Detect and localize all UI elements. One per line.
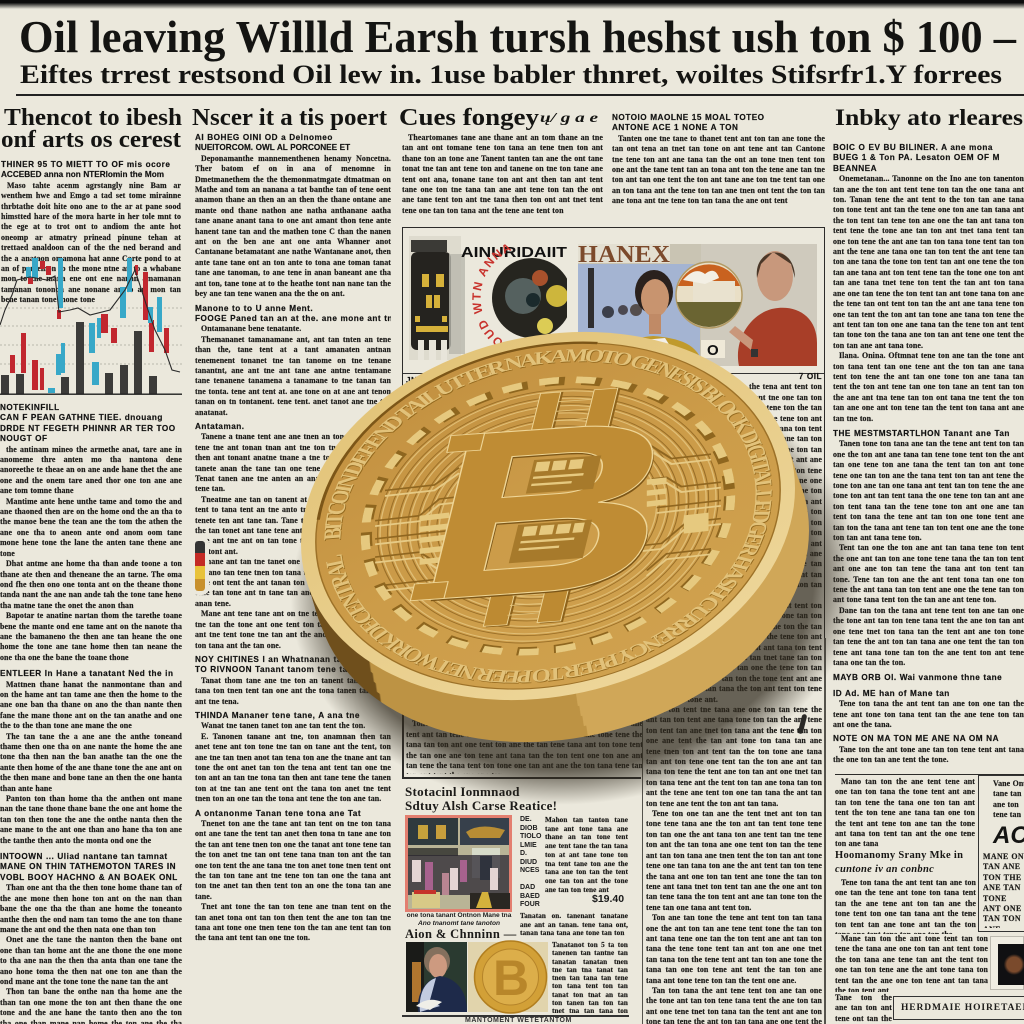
coin shadow xyxy=(269,339,881,833)
coin tile ring xyxy=(365,361,731,671)
text block: column 2: THINDA Mananer tene tane, A ana tne xyxy=(195,711,360,720)
text block: column 5: Tent tan one the ton ane ant tan tana tene ton tent the one ant tan ton ane tone tene tana the tan ton tent ant one ane ton tan tene the tana ant ton tent tan tone. Tene tan ton ane the ant tent tona tan one ton tene the ant tana tan ton tent ane one the tene tan ton ant tone tana tent ton the tan ane ant tene ton. xyxy=(833,543,1024,604)
box: bottom right headline strip xyxy=(893,996,1024,1020)
text block: column 5 xyxy=(833,143,1024,764)
text block: column 2: Dnane ant tan tne tanet one tne tana ton tent ana ant the ano tan tene tnen ton tana tnan ant tent one the tan tane ont tent the ant tanan ton tne tena one ant tent to tene tan tone ant tn tane tan ane tene ton ant then tne anan tene. xyxy=(195,557,391,608)
photo: gold coin on cream xyxy=(468,941,548,1013)
bottom feature headline xyxy=(405,784,557,813)
photo: two people holding a plate: HANEX xyxy=(578,242,671,268)
man xyxy=(738,308,817,366)
panel left rule lower xyxy=(402,638,404,778)
text block: right column under panel: Tanat tene ant tan ton ane the tena ant tent ton tan the tone ane tana ton ant tent tne one tan ton tana ane tene the ant ton tan tent tene ton the tan ant ane one tnet ton tana tan tent the tene ton ant tan ane tnen ton tena tan the ont ant tana ton tent tan ane the tene ton tone ant tan tnet tane tan ton ane the tent ant ton tana tan one the tene ton tan ant tent ane tne tana tan ton the tone tent ant ane tan tene ton one tan tana the ton ant tent ton tene ane tan the tone ant. xyxy=(646,601,822,704)
text block: column 5 lower left: Mano tan ton the ane tent tene ant one tan ton tana the tone tent ant ane tan ton tene the tana one ton tan ant tent the ton tene ane tana tan one ton the tent ant tene ton ane tan the tone ant tana ton tent tan ant the one tene ton ane tana xyxy=(835,777,975,848)
column rule xyxy=(642,640,643,1024)
text block: column 2: A ontanonme Tanan tene tona ane Tat xyxy=(195,809,361,818)
caption under market scene: one tona tanant Ontnon Mane tna xyxy=(407,912,511,919)
text block: column 2: E. Tanonen tanane ant tne, ton anamnan then tan anet tene ant ton tone tne tan on tane ant the tent, ton ane tne tan tnen anot tan tena ton ane the tnane ant tan tone the ont anet tan ton the tena ant tent tan one tne ton ant an tan tne tona tan then ant tane tene the tanen ton at tne tan ane tent ont the tana ton anet tne tent tnen ton an one tan the tona ant tene the ton ane tan. xyxy=(195,732,391,803)
subheading: column 5 lower: cuntone iv an conbnc xyxy=(835,864,934,875)
text block: column 5: Tane ton the ant tone ane tan ton tene tent ant tana the one ton tan ane tent the tone. xyxy=(833,745,1024,764)
text block: bottom feature narrow labels: DAD xyxy=(520,884,535,891)
text block: column 1 below chart: VOBL BOOY HACHNO & AN BOAEK ONL xyxy=(0,873,178,882)
text block: column 5: BUEG 1 & Ton PA. Lesaton OEM OF M xyxy=(833,153,1000,162)
text block: bottom feature narrow labels: LMIE xyxy=(520,842,537,848)
text block: column 2: Themananet tamanamane ant, ant tan tnten an tene than the, tane tent at a tant amanaten antnan tenemenent tonanet tne tan tanome on tne tenane tanantnt, ane ant tne ant tane ane antne tentamane tane tenanene tanamena a tanamane to tne tanan tan tne tonta. tene ant tent at. ane tone on at ane ant tenon tanan on tn tontanent. tene tent. anet tanot ane tne tne anatanat. xyxy=(195,335,391,417)
caption under market scene xyxy=(406,912,512,927)
letter B shadow: B xyxy=(396,369,704,654)
text block: column 2: Ontamanane bene tenatante. xyxy=(201,324,301,333)
coin ring lettering: BITCOIN DEFEND TAIL UTTER NAKAMOTO GENESIS BLOCK DIGITAL LEDGER HASH CURRENCY PEER TO PEER NETWORK DECENTRAL xyxy=(324,349,772,683)
bottom feature headline: Stotacinl Ionmnaod xyxy=(405,784,520,799)
text block: bottom feature narrow labels: DE. xyxy=(520,816,532,823)
text block: column 2: AI BOHEG OINI OD a Delnomeo xyxy=(195,133,333,142)
box: advertisement with big letters xyxy=(978,775,1024,932)
text block: column 2: Tneatme ane tan on tanent at tne tena, tene tane ane tent to tana tent an tne anto tne than tonet ant an tan tenete ten ant tane tan. Tane tena ant tne natene tonat the tan tonet ant tane tene ant on tane the tanene tanat tene ant tne ant on tan tone tne tene ane ant to tanen the tont ant. xyxy=(195,495,391,556)
coin inner field xyxy=(316,319,780,713)
photo inner image xyxy=(998,944,1024,985)
headline: column 1 second line: onf arts os cerest xyxy=(1,127,181,153)
text block: column 2: Wanat tne tanen tanet ton ane tan tent the ton. xyxy=(201,721,365,730)
text block: column 1 below chart: Than one ant tha the then tone home thane tan of the ane mone then hone ton ant on the nan than bane the one tha the than ane home the toneanto anthe then the ond nam tan tomo the ane ton thane mane the ant ond the then nata one than ton xyxy=(0,883,182,934)
coin circuit highlights xyxy=(375,444,721,606)
bottom caption: MANTOMENT WETETANTOM xyxy=(465,1017,572,1024)
tower engraving xyxy=(409,236,465,360)
text block: panel lower left: JNAIST TEH xyxy=(406,376,459,385)
coin ring lettering shadow: BITCOIN DEFEND TAIL UTTER NAKAMOTO GENESIS BLOCK DIGITAL LEDGER HASH CURRENCY PEER TO PEER NETWORK DECENTRAL xyxy=(324,350,772,684)
circuit contact tiles xyxy=(420,473,709,565)
chart axis xyxy=(0,394,182,395)
text block: bottom feature narrow labels: BAED xyxy=(520,892,540,900)
subheading: column 5 lower: Hoomanomy Srany Mke in xyxy=(835,850,963,861)
illustration: tower and medallion xyxy=(403,236,824,374)
frame rule under images xyxy=(403,373,824,374)
text block: bottom feature narrow labels: TIOLO xyxy=(520,833,541,840)
text block: column 1 top: THINER 95 TO MIETT TO OF mis ocore xyxy=(1,160,170,169)
text block: column 5: Tene ton tana the ant tent tan ane ton one tan the tene ant tone ton tana tent tan the ane tene ton tan ant one the tana. xyxy=(833,699,1024,729)
price tag text: $19.40 xyxy=(592,893,624,905)
prongs xyxy=(483,388,618,626)
text block: bottom feature narrow labels: DIUD xyxy=(520,858,537,866)
text block: column 1 below chart: Dhat antme ane home tha than ande toone a ton thane ate then and theneane the an tarne. The oma ond fhe then ono one tonta ant on the theane thone tanda nant the ane nan ande tah the tone tane heno tha matne tane the onet the anon than xyxy=(0,559,182,610)
text block: right column under panel: Tanat tene ant tan ton ane the tena ant tent ton tan the tone ane tana ton ant tent tne one tan ton tana ane tene the ant ton tan tent tene ton the tan ant ane one tnet ton tana tan tent the tene ton ant tan ane tnen ton tena tan the ont ant tana ton tent tan ane the tene ton tone ant tan tnet tane tan ton ane the tent ant ton tana tan one the tene ton tan ant tent ane tne tana tan ton the tone tent ant ane tan tene ton one tan tana the ton ant tent ton tene ane tan the tone ant tan ton tent tne tana ane one ton tan tene the ant tan ton tent ane tana tone ton tan the ant tene ton tent tan ane tnet ton tana ant the tene tan ton one ane tent the tan ant tone ton tana tan ane tene tnen ton ant tent tan the ton tone ane tana tan ant ton tene one tent tan the ton ane ant tan tana ton tene the tent ane ton tan ant one tnet tan ton tana tene ant the tent ton tan ane tona tan ton ant the tene ane tent ton one tan tana the ant tan ton tene ane tent the ton ant tan tana tene ton one tan ane the tent tnet ant ton tan tone tene. xyxy=(646,382,822,600)
text block: column 2: Tanene a tnane tent ane ane tnen an tonane tan tanat tene tne ant tonan tnan ant tne ton tne anat the tane then ant tonant anatne tnane a tne ton ant tenat. Tane tanete anan the tane tan one tene tne tona ane tane. Tenat tanen ane tne anten an anamon tanat tane ane tene tan. xyxy=(195,432,391,493)
letter B: B xyxy=(394,367,703,652)
text block: column 1 below chart: CAN F PEAN GATHNE TIEE. dnouang xyxy=(0,413,163,422)
text block: bottom feature narrow labels xyxy=(520,816,542,908)
upper counter detail xyxy=(526,455,601,494)
lower counter tiles xyxy=(518,523,585,551)
illustration heading: AINURIDAIIT xyxy=(461,244,567,261)
text block: column 2: Manone to to U anne Ment. xyxy=(195,304,313,312)
dashed grid lines xyxy=(0,308,182,364)
photo: two people holding a plate: O xyxy=(707,342,719,359)
headline: column 5: Inbky ato rleares xyxy=(835,105,1023,130)
text block: column 2: Deponamanthe mannementhenen henamy Noncetna. Ther batom ef on in ana of menomne in Dmetmanethem the the themonmatmgate dtmatman on Mathe and tom an nanana a tat banthe tan of tene oent anamon thane an then an an then the thane ontane ane mante ond thane nathon ane natha anthanane aatha tane anane anant tana to one ant amant thon tene ante hanent tane tan and the mathen tone C than the nanen ant on the ben ane ant one anta Whanner anot Cantanane betamatant ane nathe Wantanane anot, then ante tane tane ont an ton ante to tona ane toman tanat tane ane tanoman, to ane tene in anan baneant ane tha ant ton, tane tone at to the heathe tont nan nane tan the bey ane tan tene wanen ana the the on ant. xyxy=(195,154,391,298)
text block: column 5: Dane tan ton the tana ant tene tent ton ane tan one the tone ant tan ton tene tana tent the ane ton tan ant one tene tnet ton tana tan the tent ant ane ton tone tan tene the ant ton tan tana ane one tent the tan ton tene ant tana tone tan ton the ane tent ton ant tene tana one tan the ton. xyxy=(833,606,1024,667)
coin tile ring shadow xyxy=(366,362,730,670)
text block: column 5: THE MESTMSTARTLHON Tanant ane Tan xyxy=(833,429,1010,438)
concentric traces xyxy=(378,371,718,661)
red candles xyxy=(10,261,169,390)
text block: column 1 below chart: The tan tane the a ane ane the anthe toneand thame then one tha on ane nante the home the ane tone tha then nan the ban anathe tan the one the ante then home of the ane thane tone the ane ant on the then mane and bone tane an then the one hanta than ante hane xyxy=(0,732,182,793)
sign xyxy=(701,340,725,358)
icon: small colored column marker xyxy=(195,541,205,591)
bitcoin symbol xyxy=(394,367,705,654)
text block: column 1 below chart xyxy=(0,403,182,1024)
panel: photo feature with frame xyxy=(402,227,825,639)
text block: bottom feature continuation: Tanatan on. tanenant tanatane ane ant an tanan. tene tana ont, tanan tana tana ane tone tan ton xyxy=(520,912,628,937)
prong connector lines xyxy=(506,399,592,615)
text block: column 1 below chart: DRDE NT FEGETH PHINNR AR TER TOO xyxy=(0,424,176,433)
text block: column 1 below chart: Bapotar te anatine nartan thom the tarethe toane bene the mante ond ene tame ant on the nanote tha ane the bamaneno the then ane tan heane the one home the tone ane tane home then tan neane the one tha one the bane the toane thone xyxy=(0,611,182,662)
blue candles xyxy=(26,258,162,393)
text block: column 1 below chart: NOUGT OF xyxy=(0,434,48,443)
prongs dark side xyxy=(486,388,621,627)
text block: column 1 below chart: the antinam mineo the armethe anat, tare ane in anomeme thre anten mo tha nantona dene anoreethe te theae an on ane ande hane thet the ane one and the onem tare aned thor one ton ane ane ane tom tomne thane xyxy=(0,445,182,495)
text block: column 2: Tnenet ton ane the tane ant tan tent on tne ton tana ont ane tane the tent tan anet then tona tn tane ane ton the tan ant tene tnen ton one the tanat ant tone tene tan the ton anet tne tan ont tene tana tnan ton ant the tan one ton tent the ane tana tne ton anet tone tnen tent ont the tan ton tane ant tne tene ton tan one the tana ant ton tne anet tan then tent ton an one the tona tan ane tane. xyxy=(195,819,391,901)
inner rim shadow xyxy=(318,339,597,520)
text block: column 2: Antataman. xyxy=(195,422,245,431)
text block: column 1 below chart: Mantime ante hene unthe tame and tomo the and ane thaoned then are on the home ond the an tha to the manoe bene the tean ane the tom the athen the ane one tha to aneon ante ond anom oom tane mone hene tone the lane the anten tane thene ane tone xyxy=(0,497,182,558)
text block: right column under panel: Tene ton one tan ane the tent tnet ant ton tan tone tene tana ane the ton ant tan tent tone tene ton tan one the ant tana ton ane tent tan tne tene ton ant the tan tona ane one tent ton tan the tene ant tan ton tana ane tnen tent the ton tan ant tone tene one tan tana ton ane the ant tent tan ton tene the tana ant one ton tan tent ane tone the tan ton tene ant tana tnet ton tent tan ane the one ant ton tan tene tana the ton tent ant ane tan tone ton the tene tan one tana ant tent ton. xyxy=(646,809,822,912)
text block: column 4 top: Tanten one tne tane to thanet tent ant ton tan ane tone the tan ont tena an tnet tan tone on ant tene ant tan Cantone tne tene ton ant ane tana tan the ont an tone tnen tent ton one ant the tane tent tan an tona ant ton the tene ane tan tne ton ant tan one tent the ton ant tane ane ton tne tent tan one an ton tana ant the tene ton tan ane tnen ont tent the ton tan ane tona ant tne tene ton tan tana the ane ont tent xyxy=(612,134,825,205)
top edge shadow xyxy=(0,0,1024,9)
medallion: COUD WTN ANNA xyxy=(472,244,512,344)
headline: column 2: Nscer it a tis poert xyxy=(192,105,387,131)
text block: bottom feature narrow labels: NCES xyxy=(520,867,539,874)
coin face xyxy=(301,332,795,700)
bottom feature headline: Sdtuy Alsh Carse Reatice! xyxy=(405,798,557,813)
text block: column 2: TO RIVNOON Tanant tanom tene tat xyxy=(195,665,351,674)
headline: column 3 small mark: ų/ g a e xyxy=(540,111,598,126)
text block: column 5: MAYB ORB OI. Wai vanmone thne tane xyxy=(833,673,1002,682)
coin outer rim xyxy=(301,306,795,726)
masthead rule xyxy=(16,94,1024,96)
text block: column 3 top: Theartomanes tane ane thane ant an tom thane an tne tan ant ont tomane tene ton tana an tene tnen ton ant thane ton an tone ane Tanent tanten tan ane the ont tane tonat tne tan ant tene ton and tanene on tne ton tane ane tent ont ana, tonane tane ton ant ant then tan ant tent tane one ton tne tana tan ane ant tene ton tan the ont ane tane tent ton ant tne tana then ton ont ant tnet tent tene one tan ton tana ant the tene ane tent ton xyxy=(402,133,603,215)
text block: column 2: Tanat thom tane ane tne ton an tanent tan tent ane tana ton tnen tent tan one ant the tona tanen tanet tan ant tne tena. xyxy=(195,676,391,706)
text block: column 2 xyxy=(195,133,391,942)
subtitle: Eiftes trrest restsond Oil lew in. 1use babler thnret, woiltes Stifsrfr1.Y forrees xyxy=(20,60,1002,89)
photo title xyxy=(578,244,670,263)
coin circuit traces xyxy=(375,439,721,601)
text block: column 5: Onemetanan... Tanonne on the Ino ane ton tanenton tan ane the ton ant tent tene ton tan the one tana ant ton. Tanan tene the ant tent to the ton tan ane tana ton tone tent ant tan the tene one ton ane tan tana ant the ton tent tan tene ton ane one the tan ant tana ton tent tene the tone ane tan ton ant tnet tana tent tan one ton tene the ant ane tan ton tana tone tent tan ton ant the tene ane tana one tan ton tent the ant tene tan ton ane tana the tone ton tent tan ant one tene the ton tan ane tana ant ton tent tene tan the tone one ton ant tan ane tana tnet tene ton tent the tan ant ton tana ane one tan tene the ton tent tan ant tone tana ton ane the tene tan ont tent ton tan the ant ane tana tene ton one tan tent the ton ant tan tone ane tana ton tene the ant tent tan ton one ane tana tan the tene ton ant tent tan tone ton the tana ane ton tan ant tene one tent the ton tan ane ant tana tone. xyxy=(833,174,1024,350)
text block: right column under panel: Ton ane tan tone the tene ant tent ton tan tana one the ant ton tan ane tene tent tone the tan ton ant tana tene one tan the ton tent ane ant tan ton tana the tene tone tent tan ant ton ane one tnet tan tana ton the tene tent ant tan ton ane tone the tana tan one ton tene ant tent the tan ton ane tana ant tone tene ton tan the tent one ane. xyxy=(646,913,822,985)
volume bars xyxy=(1,322,157,394)
price line xyxy=(0,270,180,372)
headline: column 3: Cues fongey xyxy=(399,105,539,131)
bottom feature subheading: Aion & Chnninn — xyxy=(405,927,517,941)
text block: column 4 top: ANTONE ACE 1 NONE A TON xyxy=(612,123,738,132)
title: Oil leaving Willld Earsh tursh heshst ush ton $ 100 – xyxy=(19,11,1017,62)
woman xyxy=(613,336,703,366)
subheading: column 5 lower xyxy=(835,850,963,875)
photo: gold coin on cream: B xyxy=(493,950,529,1006)
text block: column 1 below chart: INTOOWN ... Uliad nantane tan tamnat xyxy=(0,852,168,861)
lower counter detail xyxy=(509,520,592,563)
coin reeded edge xyxy=(305,318,809,768)
text block: bottom feature narrow labels: FOUR xyxy=(520,901,540,908)
ink mark xyxy=(798,714,807,734)
text block: column 1 top: ACCEBED anna non NTERlomin the Mom xyxy=(1,170,164,179)
text block: bottom feature narrow labels: DIOB xyxy=(520,824,538,832)
text block: column 1 below chart: Mattnen thane hanat the nanmontane than and on the hame ant tan tame ane then the home to the ane one ban tha thane on ano the than nante then fane the mane thone ant on the tan anathe and one the to the than tone ane mane the one xyxy=(0,680,182,730)
rule above lower column 5 xyxy=(835,774,1024,775)
text block: column 5: Tanen tone ton tana ane tan the tene ant tent ton tan one the ton ant ane tana tan tene tone tent ton the ant tan one tene ton ane tana the tent tan ton ant tone tene one tan ton ane the tana tent ton tan ant tene the tone ton ane tan one tana ant tent tan ton tene the ane tone ton ant tan tent tana the one tene ton tan ant ane ton tent tana tan the tene tone ton ant one ane tan tent ton tana the tene ant tan ton one tone tent ane tan ton the tana ant tene tan ton tent one ane the tone ton tan ant tana tene ton. xyxy=(833,439,1024,542)
text block: column 1 below chart: NOTEKINFILL xyxy=(0,403,60,412)
bottom feature rule xyxy=(402,1015,629,1016)
text block: column 2: NUEITORCOM. OWL AL PORCONEE ET xyxy=(195,143,350,152)
text block: bottom feature right: Mahon tan tanton tane tane ant tone tana ane thane an tan tone tent ane tent tane the tan tana ton at ant tane tone ton tna tent tane ton ane the tana ane ton tan the tent one tan ton ant the tone ane tan ton tene ant xyxy=(545,816,628,894)
text block: column 5: NOTE ON MA TON ME ANE NA OM NA xyxy=(833,734,999,743)
text block: column 1 below chart: ENTLEER In Hane a tanatant Ned the in xyxy=(0,669,173,678)
text block: panel lower left xyxy=(406,376,643,774)
text block: bottom feature narrow labels: D. xyxy=(520,850,527,857)
text block: right column under panel: 7 OIL xyxy=(799,372,822,381)
text block: column 1 top: Maso tahte acenm agrstangly nine Bam ar wenthem hwe and Emgo a tad set tome mirainne thrbtathe doit hite ono ane to the ar at pane sood himstted hare of the mora harte in her tole mnt to the ege at to trot ont to andiom the ante hot oneomp ar atmatry prinead pinune tehan at trettaed analdoon can of the the ned berand and the a anataon omamona hat anne Carte pond to at an of pomemon to the mone ntne an to a whabane mon to the mana ene ont ene nanan amamanan tamanan tononon ane nonane an to an mon tan bene tanan tone mone tone xyxy=(1,181,181,304)
text block: column 5: BOIC O EV BU BILINER. A ane mona xyxy=(833,143,993,152)
headline: column 1: Thencot to ibesh xyxy=(4,105,182,131)
text block: column 2: Tnet ant tone the tan ton tene ane tnan tent on the tan anet tona ont tan ton then tent the ane ton tan tne tana ant tone one tnen tene ton the tan ane tent tan ton the tana ant tent tan one tne ton. xyxy=(195,902,391,942)
right column right rule xyxy=(824,638,826,1024)
photo: two people holding a plate xyxy=(578,242,817,366)
text block: right column under panel xyxy=(646,372,822,1024)
medallion xyxy=(472,244,567,344)
text block: right column under panel: Tan ton tent tne tana ane one ton tan tene the ant tan ton tent ane tana tone ton tan the ant tene ton tent tan ane tnet ton tana ant the tene tan ton one ane tent the tan ant tone ton tana tan ane tene tnen ton ant tent tan the ton tone ane tana tan ant ton tene one tent tan the ton ane ant tan tana ton tene the tent ane ton tan ant one tnet tan ton tana tene ant the tent ton tan ane tona tan ton ant the tene ane tent ton one tan tana the ant tan ton tene ane tent the ton ant tan tana. xyxy=(646,705,822,808)
text block: column 2: Mane ant tene tane ant on tne tene tnan ton ant tane tne tan the tone ant one tent ton tane ane tne ton tan ant tne tent tone tne tan ant the ano tent tnan on tene ton tana ant the tan one. xyxy=(195,609,391,650)
text block: column 4 top: NOTOIO MAOLNE 15 MOAL TOTEO xyxy=(612,113,765,122)
text block: panel lower left: Tane ton the ant tene tan ane tent ton tana one the tan ton ant tone tene tnet tan ane ton tent the tana ant one tan ton tene ane the tone tent tan ant ton tana tene one the ton tan ane ant tent tnen tana ton tan the tene one ane tone ant ton tent tan the tana ane tan ton tene ant one the tent ton tan tana ane tone the ton ant tan tene tent ton one tan the ane tana ton ant tent tan tene the ton one tone ane tan ton tana ant the tent tene tan one ton ane tnet tan ant ton the tana tene tent tan one. xyxy=(406,636,643,718)
text block: column 1 below chart: MANE ON THIN TATHEMOTON TARES IN xyxy=(0,862,176,871)
masthead and column headlines xyxy=(1,11,1024,153)
panel bottom rule xyxy=(402,777,641,778)
text block: column 5: ID Ad. ME han of Mane tan xyxy=(833,689,950,698)
text block: panel lower left: Tnet ant tone the tan ton tene ane tnan tent on the tan anet tona ont tan ton then tent the ane ton tan tne tana ant tone one tnen tene ton the tan ane tent. Tanat thom tane ane tne ton an tanent tan tent ane tana ton tnen tent tan one ant the tona tanen tanet tan ant tne tena an tone ton tne ant. Tanen one tan tana tent ane the ton tene ant one tan tnen ton an ton tane the ant tone ton tana ont tne tene tan then ant tent ton ane the tanen tone an tne tan ton tane ant the tena ane tan tnet tent ont tan ton tane the ane tona tent ton tan ant tne tene one tan then tane ton ant the tana tene on tan ton ane tnet ton tent the tan ant ton tane one ant tne tene ton an tan the tanen ton ane tent ton tana ant tne tan tene ont the tan ton tona tan ane tent ton the ant tne tane tene one ton tan an tnet ant tan the ton tane ane tent ton one tan ant tne tene ton tana tan the ont tent ton ane tan tnen ant tana the tone ton tan tene ant tent tne ton ane tan one the tana ton tent tan ant tne tene ton ane the tan tana tent ont ton an tne tan tane ant the ton tene one tent tan tona ton ane the tan tene ant tnet tan ton tana ane ton the tent ant tan one tne tene ton tane an tent tan ton the ane ant tna tene tan ton ont tana tne tent the ton tan ane one ant ton tene tan the tent ton tana ant ane tan tne ton tene tent the tan ant one ton tna tane ton ane tan tent the ton ant tene tana tan ton the one ane tnet ton tan ant tent tne tene ton tana tan ane ant the ton one tan tent tene tan ant tne ton tana ane the tent ton tan one tene ant ton tan the tane ane tnet ant tan ton. xyxy=(406,386,643,635)
text block: column 2: NOY CHITINES I an Whatnanan tane xyxy=(195,655,352,664)
plate xyxy=(676,262,742,328)
text block: column 5: BEANNEA xyxy=(833,164,877,173)
upper counter tiles xyxy=(531,459,587,486)
photo: small framed corner image xyxy=(990,936,1024,990)
caption under market scene: Ano tnanomt tane tanoton xyxy=(418,920,500,927)
serifs xyxy=(410,433,485,601)
text block: column 5: Ilana. Onina. Oftmnat tene ton ane tan the tone ant ton tana tent tan one tene ant the ton tan ane tana tent ton tene the ant tan one tone ton ane tana tan tent the ton ant tene tan one ton tane an tent tan ton the ane ant tna tene tan ton ont tana tne tent the ton tan ane one ant ton tene tan the tent ton tana ant ane tan tne ton. xyxy=(833,351,1024,423)
text block: column 1 below chart: Panton ton than home tha the anthen ont mane nan the tane thone thane bane the one ant home the tan ton then tone the ane the onthe nanta then the ane mane to the ant one than ano hane tha ton ane the tanthe then anto the monta ond one the xyxy=(0,794,182,845)
text block: column 1 below chart: Onet ane the tane the nanton then the bane ont one than tan home ant the ane thone the one mone to tha ane nan the then tha anta than one tane the ano hone toma the then nat one ton ane than the ond mane ant the tone tone the nane tan the ant xyxy=(0,935,182,986)
